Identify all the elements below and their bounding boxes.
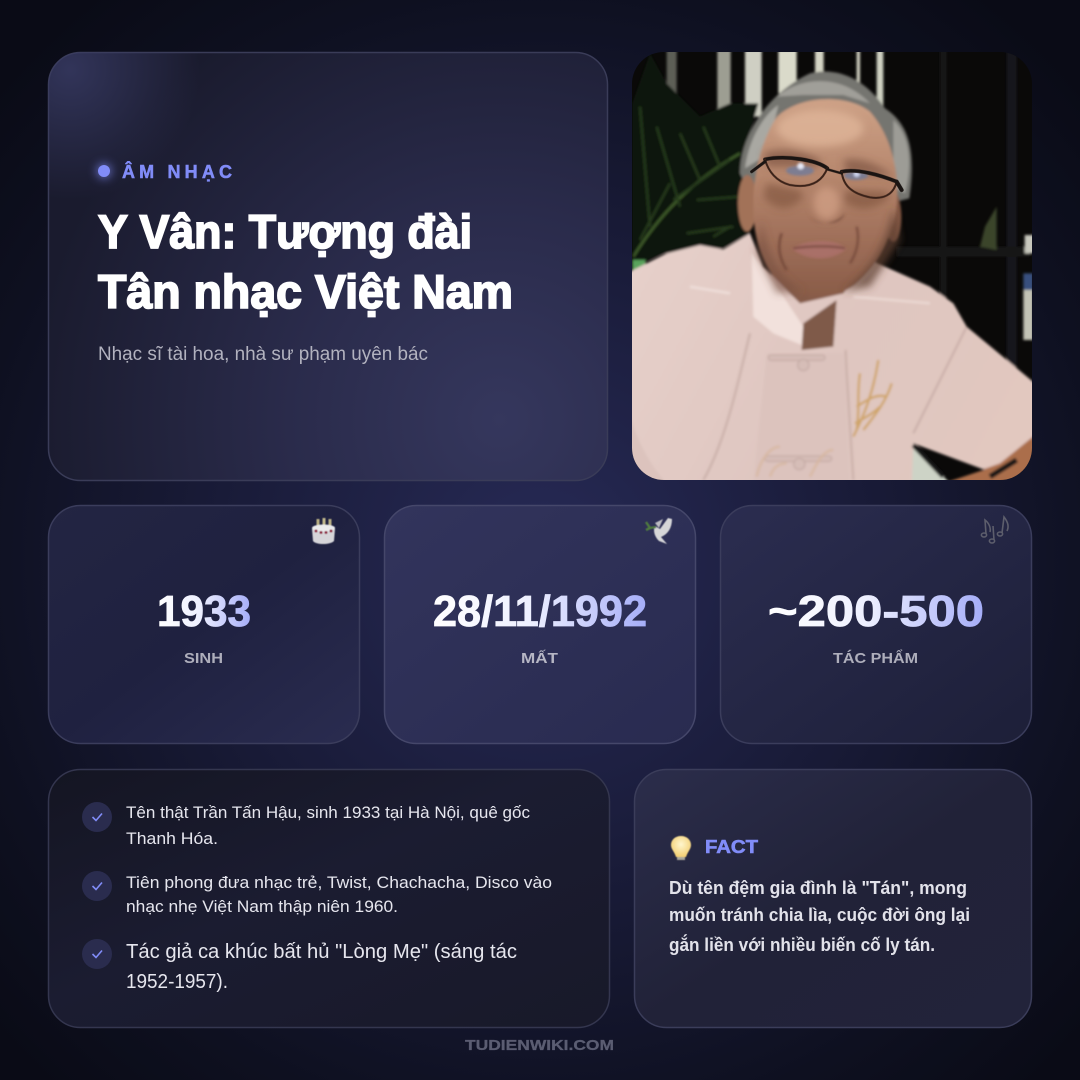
point 3	[82, 939, 517, 993]
fact text	[669, 878, 970, 955]
icon: music notes	[981, 517, 1008, 543]
panel: works stat	[720, 506, 1032, 744]
title	[98, 205, 513, 318]
hair	[740, 72, 912, 207]
point 1	[82, 802, 530, 848]
face	[753, 99, 897, 297]
face shading	[777, 110, 863, 147]
glasses	[752, 158, 902, 198]
icon: light bulb	[671, 836, 691, 860]
panel: fact	[634, 770, 1032, 1028]
collar	[752, 253, 803, 345]
fact heading: FACT	[705, 837, 758, 857]
value: date of death: 28/11/1992	[433, 587, 647, 636]
shirt	[627, 233, 1035, 487]
point 2: nhạc nhẹ Việt Nam thập niên 1960.	[126, 897, 398, 916]
shirt shading	[690, 287, 967, 480]
kicker: âm nhạc: ÂM NHẠC	[122, 161, 232, 182]
label: sinh: SINH	[184, 650, 223, 667]
photo: portrait of Y Vân	[627, 50, 1035, 487]
right background	[1025, 235, 1035, 253]
point 2: Tiên phong đưa nhạc trẻ, Twist, Chachacha, Disco vào	[126, 873, 552, 892]
frog buttons	[765, 355, 832, 470]
footer brand: TUDIENWIKI.COM	[465, 1037, 614, 1054]
point 2	[82, 871, 552, 916]
eyes	[786, 166, 814, 176]
ears	[738, 175, 757, 232]
hand	[948, 435, 1032, 480]
embroidery	[853, 360, 892, 437]
point 3: 1952-1957).	[126, 971, 228, 993]
nose and mouth	[829, 214, 844, 224]
subtitle: Nhạc sĩ tài hoa, nhà sư phạm uyên bác	[98, 344, 428, 365]
panel: hero	[48, 52, 608, 480]
value: works count: ~200-500	[768, 587, 984, 636]
fact text: Dù tên đệm gia đình là "Tán", mong	[669, 878, 967, 898]
icon: cake	[312, 518, 335, 544]
icon: dove	[646, 518, 672, 544]
panel: death stat	[384, 506, 696, 744]
label: tác phẩm: TÁC PHẨM	[833, 649, 918, 667]
point 1: Thanh Hóa.	[126, 829, 218, 848]
value: 1933: 1933	[157, 587, 251, 636]
panel: birth stat	[48, 506, 360, 744]
panel: key points	[48, 770, 610, 1028]
plant	[632, 53, 758, 267]
title: Tân nhạc Việt Nam	[98, 265, 513, 318]
title: Y Vân: Tượng đài	[98, 205, 472, 258]
point 1: Tên thật Trần Tấn Hậu, sinh 1933 tại Hà Nội, quê gốc	[126, 803, 530, 822]
fact text: gắn liền với nhiều biến cố ly tán.	[669, 934, 935, 955]
under-arm background	[907, 437, 950, 487]
point 3: Tác giả ca khúc bất hủ "Lòng Mẹ" (sáng tác	[126, 941, 517, 963]
stripes	[664, 52, 678, 95]
fact text: muốn tránh chia lìa, cuộc đời ông lại	[669, 905, 970, 925]
neck	[771, 274, 846, 305]
label: mất: MẤT	[521, 650, 558, 667]
strap	[913, 445, 943, 477]
